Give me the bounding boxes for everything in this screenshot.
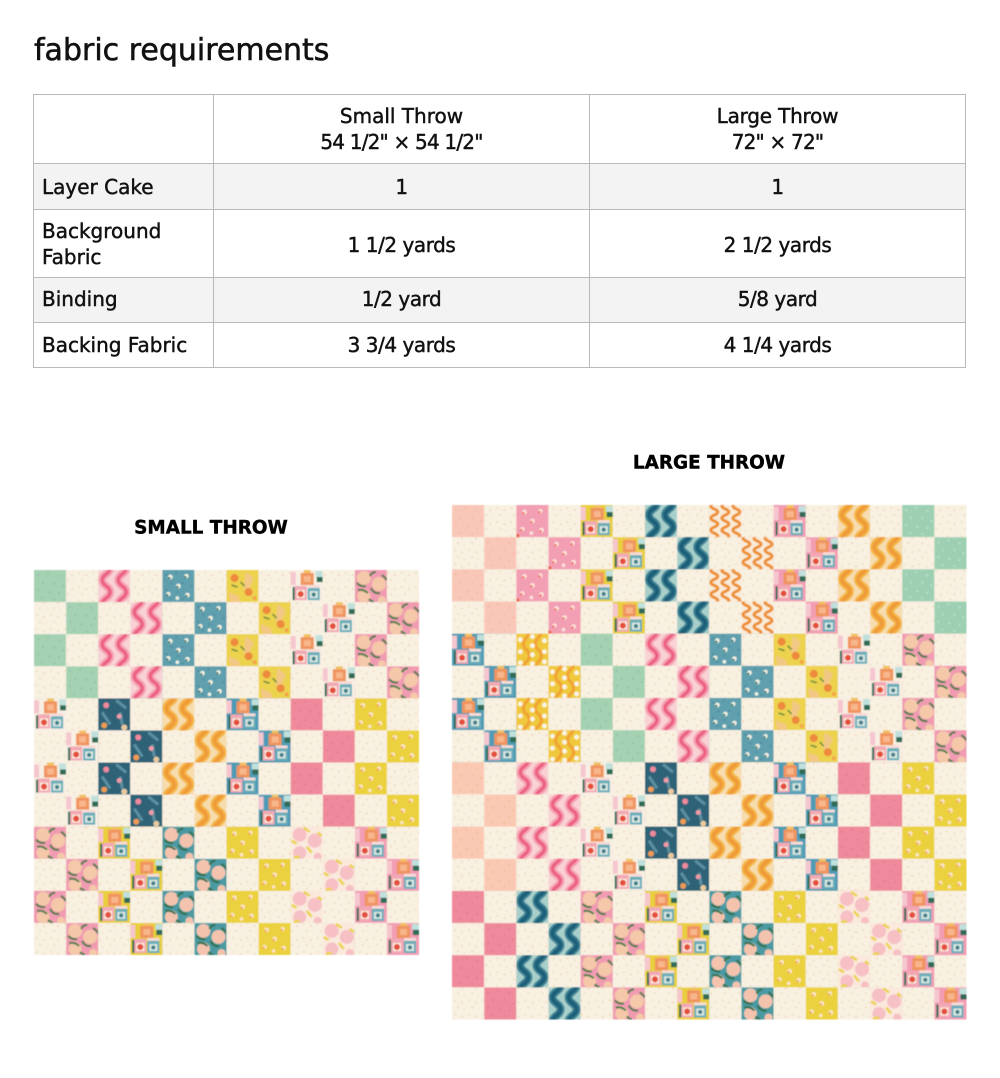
row: background fabric: 1 1/2 yards — [348, 232, 455, 256]
row: backing fabric: 3 3/4 yards — [348, 333, 455, 357]
quilt: small throw — [34, 570, 419, 955]
row: backing fabric — [42, 333, 831, 357]
row: background fabric: Fabric — [42, 244, 101, 268]
table header row: Large Throw — [717, 104, 838, 128]
large quilt: fourth row of blocks — [452, 891, 967, 1020]
row: backing fabric: 4 1/4 yards — [724, 333, 831, 357]
large quilt: first row of blocks — [452, 505, 967, 634]
table header row: 54 1/2" × 54 1/2" — [320, 130, 483, 154]
large quilt: second row of blocks — [452, 634, 967, 762]
title: fabric requirements — [34, 33, 329, 68]
row: background fabric: Background — [42, 218, 161, 242]
row: layer cake — [34, 164, 965, 209]
heading: large throw: LARGE THROW — [633, 452, 785, 474]
row: layer cake: Layer Cake — [42, 174, 154, 198]
row: binding — [34, 278, 965, 322]
table header row — [34, 104, 965, 357]
row: binding: 5/8 yard — [738, 287, 817, 311]
row: layer cake: 1 — [395, 174, 408, 198]
row: layer cake: 1 — [771, 174, 784, 198]
row: binding: 1/2 yard — [362, 287, 441, 311]
row: background fabric: 2 1/2 yards — [724, 232, 831, 256]
row: background fabric — [42, 218, 831, 268]
small quilt: bottom row of blocks — [34, 827, 419, 955]
row: backing fabric: Backing Fabric — [42, 333, 187, 357]
quilt: large throw — [452, 505, 967, 1020]
small quilt: middle row of blocks — [34, 698, 419, 827]
table header row: Small Throw — [340, 104, 463, 128]
large quilt: third row of blocks — [452, 762, 967, 891]
row: binding: Binding — [42, 287, 118, 311]
small quilt: top row of blocks — [34, 570, 419, 698]
table header row: 72" × 72" — [732, 130, 823, 154]
table: fabric requirements — [33, 94, 966, 368]
heading: small throw: SMALL THROW — [134, 518, 288, 538]
